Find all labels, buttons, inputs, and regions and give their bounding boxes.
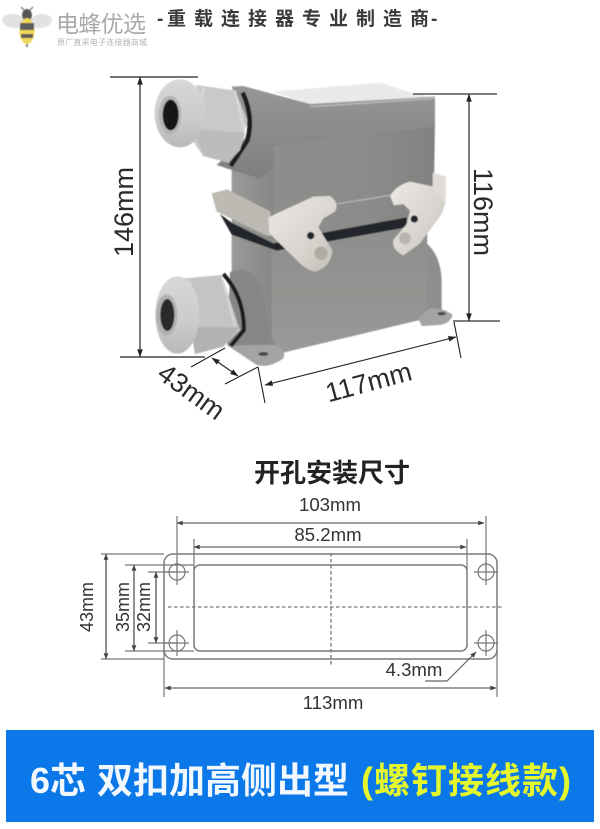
product title banner	[6, 730, 594, 822]
dimension: 35mm	[113, 565, 134, 651]
upper cable gland	[155, 79, 250, 166]
top ridge highlight	[310, 98, 435, 107]
cutout technical drawing	[77, 494, 502, 713]
logo: 电蜂优选	[1, 7, 147, 47]
header slogan: -重载连接器专业制造商-	[157, 8, 437, 30]
right latch back	[433, 173, 446, 205]
right mounting foot	[418, 308, 453, 326]
dimension: 117mm width: 117mm	[322, 356, 415, 408]
upper hood	[217, 86, 435, 178]
rear right bulge	[418, 243, 442, 318]
left side face	[232, 160, 277, 353]
top cover face	[273, 83, 435, 105]
banner title: white: 6芯	[30, 760, 86, 801]
callout: 4.3mm hole	[386, 652, 476, 681]
lower cable gland	[155, 274, 244, 354]
dimension: 43mm	[77, 554, 106, 659]
outer flange outline	[164, 554, 497, 659]
dimension: 43mm depth	[152, 348, 258, 426]
logo name: 电蜂优选	[56, 11, 146, 37]
dimension: 43mm depth: 43mm	[152, 358, 230, 426]
dimension: 146mm height	[109, 77, 205, 357]
extension lines	[101, 516, 497, 697]
right latch plate	[390, 182, 445, 255]
dimension: 85.2mm: 85.2mm	[294, 524, 362, 545]
inner opening outline	[194, 565, 467, 651]
dimension: 116mm height: 116mm	[468, 168, 498, 256]
callout: 4.3mm hole: 4.3mm	[386, 659, 442, 680]
front face upper	[273, 125, 435, 243]
left mounting foot	[228, 345, 284, 366]
banner subtitle: yellow: (螺钉接线款)	[361, 760, 571, 801]
front face lower	[272, 217, 427, 353]
banner title: white: 双扣加高侧出型	[97, 760, 349, 801]
dimension: 43mm: 43mm	[77, 582, 97, 632]
product photo: connector housing	[155, 79, 453, 366]
gasket band	[220, 214, 407, 251]
mounting holes	[165, 560, 498, 656]
dimension: 32mm	[134, 572, 156, 643]
dimension: 32mm: 32mm	[134, 582, 154, 632]
dimension: 35mm: 35mm	[113, 582, 133, 632]
dimension: 146mm height: 146mm	[109, 167, 139, 257]
lower side block	[227, 269, 269, 357]
left latch rail	[212, 189, 271, 236]
dimension: 103mm: 103mm	[299, 494, 361, 515]
dimension: 113mm: 113mm	[303, 692, 363, 713]
seam line	[337, 195, 390, 204]
dimension: 117mm width	[258, 322, 461, 408]
section heading: 开孔安装尺寸: 开孔安装尺寸	[254, 458, 410, 488]
dimension: 116mm height	[413, 94, 500, 321]
left latch plate	[268, 196, 337, 272]
logo tagline: 原厂直采电子连接器商城	[57, 37, 147, 47]
centre lines	[168, 553, 502, 667]
icon: bee	[1, 7, 53, 47]
